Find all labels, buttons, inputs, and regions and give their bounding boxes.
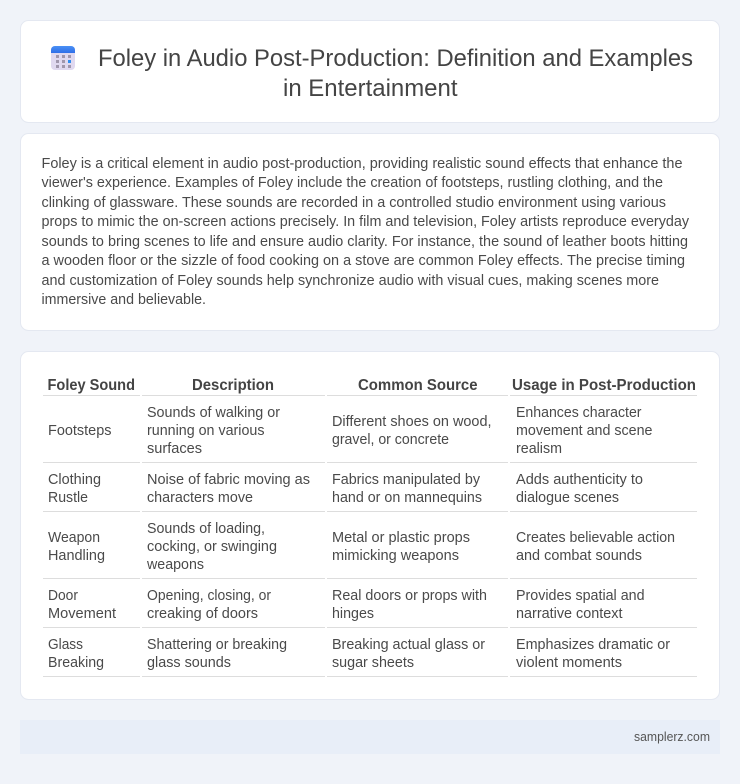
text block: Foley description: Foley is a critical element in audio post-production, providing realistic sound effects that enhance the xyxy=(42,156,682,172)
table row: Glass Breaking: Breaking actual glass or xyxy=(332,637,485,653)
table row: Weapon Handling: weapons xyxy=(146,557,204,573)
title: in Entertainment xyxy=(283,75,458,102)
text block: Foley description: immersive and believable. xyxy=(42,292,206,308)
table row: Clothing Rustle xyxy=(48,472,643,506)
table row: Footsteps: movement and scene xyxy=(516,423,652,439)
table row: Footsteps: gravel, or concrete xyxy=(332,432,449,448)
table row: Door Movement: Door xyxy=(48,588,78,604)
table row: Footsteps: Enhances character xyxy=(516,405,642,421)
table row: Weapon Handling: cocking, or swinging xyxy=(147,539,277,555)
table row: Door Movement: Opening, closing, or xyxy=(147,588,271,604)
table row: Footsteps: surfaces xyxy=(147,441,202,457)
panel: intro paragraph xyxy=(20,134,720,330)
table row: Clothing Rustle: dialogue scenes xyxy=(516,490,619,506)
table row: Door Movement: narrative context xyxy=(516,606,622,622)
table row: Glass Breaking: violent moments xyxy=(516,655,622,671)
table row: Door Movement: Real doors or props with xyxy=(332,588,487,604)
text block: Foley description: viewer's experience. Examples of Foley include the creation of footsteps, rustling clothing, and the xyxy=(42,175,663,191)
table row: Footsteps xyxy=(48,405,652,457)
table row: Clothing Rustle: characters move xyxy=(147,490,253,506)
icon: calendar grid xyxy=(51,46,75,70)
table row: Weapon Handling: and combat sounds xyxy=(516,548,642,564)
table row: Glass Breaking: Glass xyxy=(48,637,83,653)
text block: Foley description: and customization of Foley sounds help synchronize audio with visual cues, making scenes more xyxy=(42,273,659,289)
table row: Weapon Handling xyxy=(48,521,675,573)
table row: Clothing Rustle: Rustle xyxy=(48,490,88,506)
table row: Door Movement: creaking of doors xyxy=(147,606,258,622)
table row: Footsteps: running on various xyxy=(147,423,264,439)
footer xyxy=(20,720,720,754)
table row: Glass Breaking: Emphasizes dramatic or xyxy=(516,637,670,653)
table row: Weapon Handling: mimicking weapons xyxy=(332,548,459,564)
title xyxy=(98,45,693,102)
table row: Weapon Handling: Sounds of loading, xyxy=(147,521,265,537)
panel: table xyxy=(20,352,720,700)
table row: Footsteps: Footsteps xyxy=(48,423,112,439)
table row: Glass Breaking: Breaking xyxy=(48,655,104,671)
table row: Glass Breaking: sugar sheets xyxy=(332,655,414,671)
table header row xyxy=(48,377,696,394)
table row: Glass Breaking xyxy=(48,637,670,671)
table row: Footsteps: Sounds of walking or xyxy=(147,405,280,421)
table row: Weapon Handling: Creates believable action xyxy=(516,530,675,546)
table row: Glass Breaking: glass sounds xyxy=(147,655,231,671)
table row: Door Movement: Movement xyxy=(48,606,116,622)
table row: Footsteps: Different shoes on wood, xyxy=(332,414,492,430)
text block: Foley description: sounds to bring scenes to life and ensure audio clarity. For instance, the sound of leather boots hitting xyxy=(42,234,688,250)
table row: Door Movement: hinges xyxy=(332,606,374,622)
text block: Foley description: a wooden floor or the sizzle of food cooking on a stove are common Foley effects. The precise timing xyxy=(42,253,685,269)
table row: Clothing Rustle: Fabrics manipulated by xyxy=(332,472,481,488)
table row: Glass Breaking: Shattering or breaking xyxy=(147,637,287,653)
text block: Foley description: props to mimic the on-screen actions precisely. In film and television, Foley artists reproduce everyday xyxy=(42,214,690,230)
table row: Weapon Handling: Weapon xyxy=(48,530,100,546)
text block: Foley description: clinking of glassware. These sounds are recorded in a controlled studio environment using various xyxy=(42,195,666,211)
panel: header xyxy=(20,20,720,122)
table row: Weapon Handling: Handling xyxy=(48,548,105,564)
table header row: Foley Sound xyxy=(48,377,135,394)
table row: Door Movement xyxy=(48,588,644,622)
text block: Foley description xyxy=(42,156,690,308)
table row: Clothing Rustle: Noise of fabric moving as xyxy=(147,472,310,488)
table row: Footsteps: realism xyxy=(516,441,562,457)
table row: Weapon Handling: Metal or plastic props xyxy=(332,530,470,546)
table header row: Usage in Post-Production xyxy=(512,377,696,394)
table row: Clothing Rustle: hand or on mannequins xyxy=(332,490,482,506)
footer: samplerz.com xyxy=(634,729,710,744)
title: Foley in Audio Post-Production: Definition and Examples xyxy=(98,45,693,72)
table row: Door Movement: Provides spatial and xyxy=(516,588,644,604)
table row: Clothing Rustle: Clothing xyxy=(48,472,101,488)
table row: Clothing Rustle: Adds authenticity to xyxy=(516,472,643,488)
table header row: Common Source xyxy=(358,377,478,394)
table header row: Description xyxy=(192,377,274,394)
